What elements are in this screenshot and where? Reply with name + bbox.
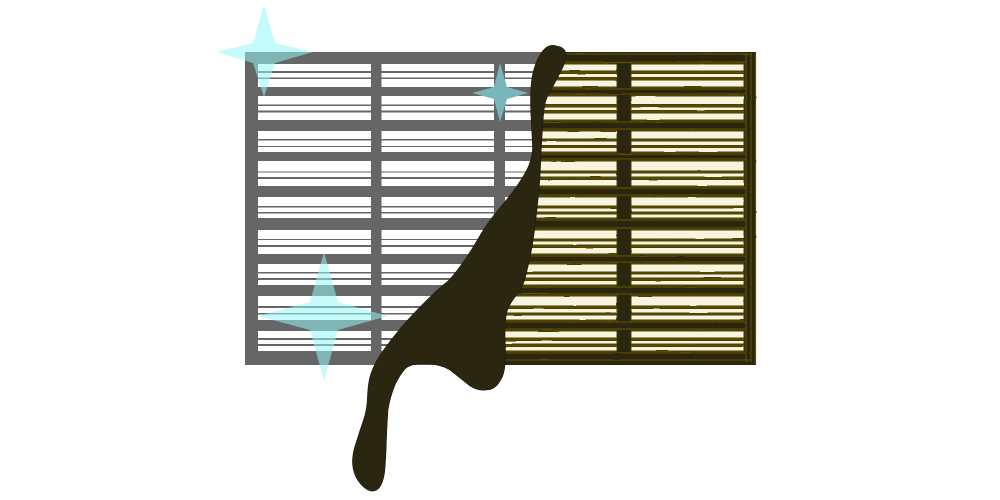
sparkle: small teal star [472,63,528,122]
oil spill blob [352,45,566,491]
sparkle: bottom left star [258,252,388,381]
dirty panel: dark frame with cream cells [505,52,757,365]
sparkle: top left star [217,5,313,97]
clean panel: grey frame with white cells [245,52,617,365]
illustration: solar panel half clean, half covered by oil [217,6,757,492]
